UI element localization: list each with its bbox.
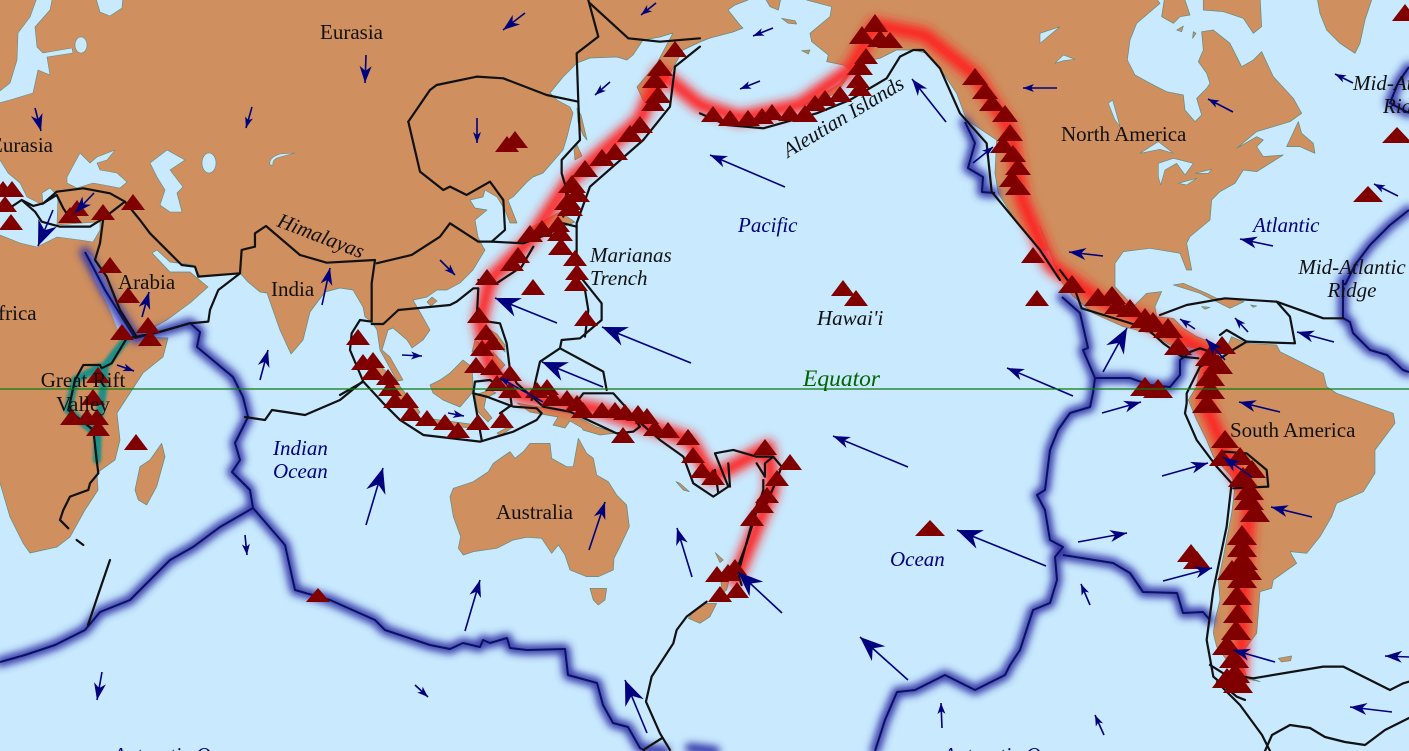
arrow: Bering Sea south — [740, 81, 760, 89]
arrow: western Canada — [1023, 87, 1057, 89]
arrow: eastern Canada — [1208, 99, 1233, 112]
boundaries in East Asia and Philippine Sea — [377, 0, 700, 263]
boundaries around Africa, Arabia and Iran — [0, 188, 300, 545]
Ring of Fire red glow — [480, 25, 1250, 680]
label: Ocean: Ocean — [890, 547, 945, 571]
label: Indian Ocean: Indian — [273, 436, 328, 460]
water: Caspian Sea — [150, 150, 185, 212]
Tonga, Kermadec and New Zealand boundary — [643, 480, 763, 750]
label: Great Rift Valley: Valley — [56, 392, 110, 416]
arrow: Siberia — [503, 13, 525, 30]
arrow: south Pacific — [860, 637, 908, 680]
land: Borneo — [430, 360, 473, 407]
arrow: New Zealand — [738, 572, 782, 613]
arrow: Patagonia — [1233, 650, 1275, 662]
arrow: Nazca to Peru — [1162, 463, 1208, 476]
label: Australia: Australia — [496, 500, 574, 524]
arrow: Mid-Atlantic north — [1335, 74, 1353, 83]
arrow: north-east Siberia — [641, 3, 656, 15]
arrow: southern Indian Ocean — [245, 535, 247, 555]
label: Aleutian Islands: Aleutian Islands — [776, 71, 908, 163]
label: Mid-Atlantic Ridge: Mid-Atlantic — [1298, 255, 1406, 279]
arrow: Atlantic — [1240, 239, 1273, 246]
arrow: Pacific near Marianas — [602, 327, 691, 363]
arrow: Indian Ocean — [366, 468, 383, 525]
label: Indian Ocean: Ocean — [273, 459, 328, 483]
land: Madagascar — [135, 443, 165, 505]
arrow: Gulf of Mexico — [1069, 252, 1103, 256]
arrow: Amur plate — [476, 118, 478, 143]
land: Australia — [450, 438, 629, 577]
arrow: Caribbean east — [1235, 318, 1248, 332]
label: India: India — [271, 277, 315, 301]
arrow: Antarctic plate south of Australia — [415, 685, 428, 697]
Indian Ocean boundary lines — [88, 382, 362, 625]
land: Falkland Islands — [1278, 656, 1292, 662]
land: South America — [1188, 337, 1395, 682]
arrow: central Asia — [246, 107, 252, 128]
label: South America: South America — [1230, 418, 1356, 442]
label: Mid-Atlantic Ridge: Ridge — [1327, 278, 1376, 302]
arrow: Atlantic volcano — [1374, 184, 1398, 196]
arrow: Antarctic near Chile — [1081, 584, 1090, 605]
arrow: Sunda — [402, 355, 422, 356]
land: patch joining western and eastern North America — [1036, 0, 1054, 226]
arrow: north Nazca — [1102, 402, 1141, 413]
arrow: south Nazca — [1163, 568, 1212, 581]
arrow: central Pacific south — [833, 436, 908, 467]
arrow: Anatolia — [75, 193, 94, 213]
arrow: mid Nazca — [1078, 533, 1127, 542]
arrow: Banda Sea — [500, 378, 543, 402]
arrow: Java Sea — [448, 413, 464, 416]
land: eastern North America and Central America — [1040, 0, 1302, 350]
arrow: Bering Sea north — [753, 28, 773, 36]
land: Newfoundland — [1287, 122, 1315, 153]
arrow: south of Australia — [465, 580, 480, 631]
arrow: Sea of Okhotsk — [595, 82, 610, 95]
water: Baltic Sea — [0, 0, 73, 104]
label: Marianas Trench: Marianas — [590, 243, 672, 267]
arrow: Antarctic plate centre — [941, 703, 942, 728]
Aleutian Trench and North American coast boundary — [700, 50, 1060, 280]
land: Sulawesi — [475, 390, 496, 422]
arrow: Somalia — [117, 365, 134, 371]
land: Alaska and western Canada — [800, 0, 1050, 250]
label: Great Rift Valley: Great Rift — [41, 368, 125, 392]
water: Red Sea — [85, 250, 137, 340]
arrow: Amazon — [1239, 402, 1280, 412]
label: Pacific: Pacific — [737, 213, 798, 237]
label: Arabia: Arabia — [118, 270, 176, 294]
land: Japan and Sakhalin — [530, 108, 587, 232]
arrow: Pacific Ocean label — [957, 530, 1046, 566]
arrow: Mediterranean — [38, 210, 53, 246]
equator line — [0, 388, 1409, 390]
water: White Sea — [95, 0, 123, 16]
arrow: south China — [440, 260, 455, 275]
arrow: Antarctic plate west — [97, 672, 102, 700]
arrow: Eurasia north — [365, 55, 366, 83]
arrow: Altiplano — [1223, 457, 1252, 477]
boundaries around Caribbean, Cocos and South America — [1060, 270, 1409, 700]
Great Rift Valley teal band — [68, 338, 127, 460]
label: Eurasia: Eurasia — [320, 20, 384, 44]
label: Himalayas: Himalayas — [273, 208, 368, 263]
land: Sumatra and Java — [372, 358, 472, 428]
arrow: Arabian Sea — [260, 350, 268, 380]
arrow: Colombia — [1206, 339, 1225, 360]
arrow: India — [322, 268, 330, 305]
water: Mediterranean Sea — [0, 155, 100, 247]
arrow: south-west Pacific — [625, 680, 647, 733]
arrow: Caribbean west — [1180, 319, 1195, 329]
arrow: south Atlantic edge — [1385, 656, 1409, 657]
land: Canadian Arctic islands — [1162, 0, 1262, 38]
land: Siberian islands near Bering Strait — [763, 0, 810, 54]
arrow: Brazil — [1271, 507, 1312, 517]
arrow: Caroline plate — [542, 362, 603, 387]
arrow: Australia — [589, 502, 605, 550]
water: Lake Ladoga — [75, 37, 87, 53]
arrow: Scotia Sea — [1350, 707, 1392, 712]
arrow: Philippine Sea — [495, 298, 557, 323]
label: Hawai'i: Hawai'i — [816, 306, 883, 330]
land: Tasmania — [590, 588, 607, 605]
land: Cuba and Hispaniola — [1173, 283, 1257, 309]
label: Atlantic: Atlantic — [1251, 213, 1320, 237]
boundaries in Southeast Asia and the western Pacific — [300, 247, 782, 503]
water: Aral Sea — [202, 153, 216, 173]
arrow: equatorial Pacific — [1007, 368, 1073, 396]
arrow: Europe — [35, 108, 41, 131]
land: New Guinea and Timor — [497, 403, 617, 436]
label: Marianas Trench: Trench — [590, 266, 648, 290]
arrow: Cocos plate — [1103, 328, 1127, 372]
arrow: Juan de Fuca — [973, 147, 993, 163]
land: New Zealand and New Caledonia — [676, 482, 730, 623]
arrow: western Atlantic — [1297, 332, 1334, 342]
arrow: Gulf of Alaska — [912, 79, 946, 122]
land: Taiwan, Hainan, Philippines — [427, 297, 505, 372]
water: Black Sea — [67, 150, 127, 188]
land: Eurasia, Arabia and Africa — [0, 0, 748, 553]
label: North America: North America — [1061, 122, 1187, 146]
arrow: Arabia — [142, 292, 149, 317]
land: Greenland — [1317, 0, 1373, 53]
water: Canadian and Great Lakes — [1040, 27, 1212, 185]
arrow: Tasman Sea — [677, 528, 692, 577]
water: Lake Balkhash — [270, 153, 295, 165]
label: Equator: Equator — [802, 366, 881, 392]
arrow: Antarctic plate east — [1095, 715, 1104, 735]
Scotia and Sandwich plate lines — [1217, 682, 1409, 751]
arrow: north Pacific — [710, 155, 785, 187]
